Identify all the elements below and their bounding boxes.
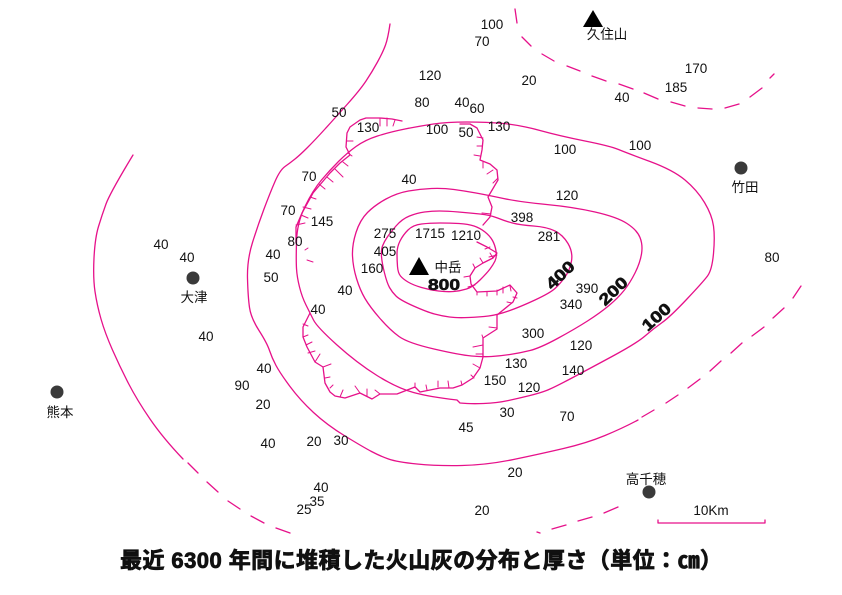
spot thickness values: 390 (576, 281, 598, 296)
spot thickness values: 160 (361, 261, 383, 276)
spot thickness values: 80 (287, 234, 303, 249)
spot thickness values: 130 (357, 120, 379, 135)
contour: 20 cm western solid section (94, 155, 183, 459)
caldera rim: north-west (296, 118, 402, 262)
spot thickness values: 35 (309, 494, 325, 509)
spot thickness values: 20 (507, 465, 523, 480)
spot thickness values: 100 (426, 122, 448, 137)
spot thickness values: 40 (313, 480, 329, 495)
contour: northeast dashed line (515, 9, 774, 109)
spot thickness values: 140 (562, 363, 584, 378)
scale bar: 10 km (658, 503, 765, 523)
spot thickness values: 340 (560, 297, 582, 312)
place name: Kuju: 久住山 (587, 27, 627, 42)
contour label: 400: 400 (543, 258, 579, 293)
contour label: 800: 800 (428, 277, 460, 294)
spot thickness values: 130 (505, 356, 527, 371)
spot thickness values: 20 (255, 397, 271, 412)
spot thickness values: 40 (265, 247, 281, 262)
spot thickness values: 120 (570, 338, 592, 353)
spot thickness values: 80 (764, 250, 780, 265)
caldera rim: south and east (303, 242, 517, 399)
contour: 100 cm (296, 122, 714, 404)
place name: Nakadake: 中岳 (434, 260, 462, 275)
place name: Kumamoto: 熊本 (46, 405, 74, 420)
spot thickness values: 100 (481, 17, 503, 32)
contour: 200 cm (352, 188, 642, 357)
contour: 20 cm western dashed section (188, 463, 290, 533)
icon: Ozu city marker (186, 272, 200, 284)
spot thickness values: 1210 (451, 228, 481, 243)
spot thickness values: 170 (685, 61, 707, 76)
place name: Takachiho: 高千穂 (626, 471, 667, 487)
icon: Takachiho city marker (642, 486, 656, 498)
place name: Taketa: 竹田 (732, 180, 758, 195)
contour: 400 cm (381, 211, 572, 318)
spot thickness values: 40 (260, 436, 276, 451)
place name: Ozu: 大津 (180, 290, 208, 305)
spot thickness values: 20 (306, 434, 322, 449)
spot thickness values: 100 (629, 138, 651, 153)
title: 最近 6300 年間に堆積した火山灰の分布と厚さ（単位：㎝） (120, 548, 722, 573)
spot thickness values: 40 (198, 329, 214, 344)
spot thickness values: 50 (263, 270, 279, 285)
spot thickness values: 30 (333, 433, 349, 448)
spot thickness values: 1715 (415, 226, 445, 241)
spot thickness values: 25 (296, 502, 312, 517)
spot thickness values: 40 (337, 283, 353, 298)
icon: Kumamoto city marker (50, 386, 64, 398)
spot thickness values: 40 (401, 172, 417, 187)
spot thickness values (153, 17, 780, 518)
spot thickness values: 300 (522, 326, 544, 341)
spot thickness values: 130 (488, 119, 510, 134)
contour: 50 cm dashed section (537, 286, 801, 533)
caldera rim: north-east (460, 124, 498, 225)
spot thickness values: 40 (454, 95, 470, 110)
icon: Taketa city marker (734, 162, 748, 174)
spot thickness values: 70 (559, 409, 575, 424)
spot thickness values: 120 (419, 68, 441, 83)
spot thickness values: 30 (499, 405, 515, 420)
spot thickness values: 60 (469, 101, 485, 116)
contour label: 200: 200 (596, 274, 632, 309)
scale bar: 10 km: 10Km (693, 503, 729, 518)
contour: 50 cm upper-left and bottom solid section (247, 24, 638, 466)
spot thickness values: 90 (234, 378, 250, 393)
spot thickness values: 70 (301, 169, 317, 184)
spot thickness values: 50 (331, 105, 347, 120)
spot thickness values: 145 (311, 214, 333, 229)
spot thickness values: 40 (179, 250, 195, 265)
spot thickness values: 70 (474, 34, 490, 49)
spot thickness values: 120 (518, 380, 540, 395)
icon: Mt. Kuju peak (583, 10, 603, 27)
spot thickness values: 20 (521, 73, 537, 88)
spot thickness values: 275 (374, 226, 396, 241)
spot thickness values: 20 (474, 503, 490, 518)
spot thickness values: 120 (556, 188, 578, 203)
spot thickness values: 100 (554, 142, 576, 157)
spot thickness values: 40 (256, 361, 272, 376)
spot thickness values: 70 (280, 203, 296, 218)
icon: Nakadake peak (409, 257, 429, 275)
contour: 800 cm (397, 223, 496, 292)
spot thickness values: 281 (538, 229, 560, 244)
spot thickness values: 50 (458, 125, 474, 140)
spot thickness values: 405 (374, 244, 396, 259)
spot thickness values: 45 (458, 420, 474, 435)
spot thickness values: 40 (153, 237, 169, 252)
spot thickness values: 398 (511, 210, 533, 225)
spot thickness values: 40 (310, 302, 326, 317)
spot thickness values: 150 (484, 373, 506, 388)
spot thickness values: 185 (665, 80, 687, 95)
spot thickness values: 80 (414, 95, 430, 110)
spot thickness values: 40 (614, 90, 630, 105)
contour label: 100: 100 (639, 300, 675, 335)
